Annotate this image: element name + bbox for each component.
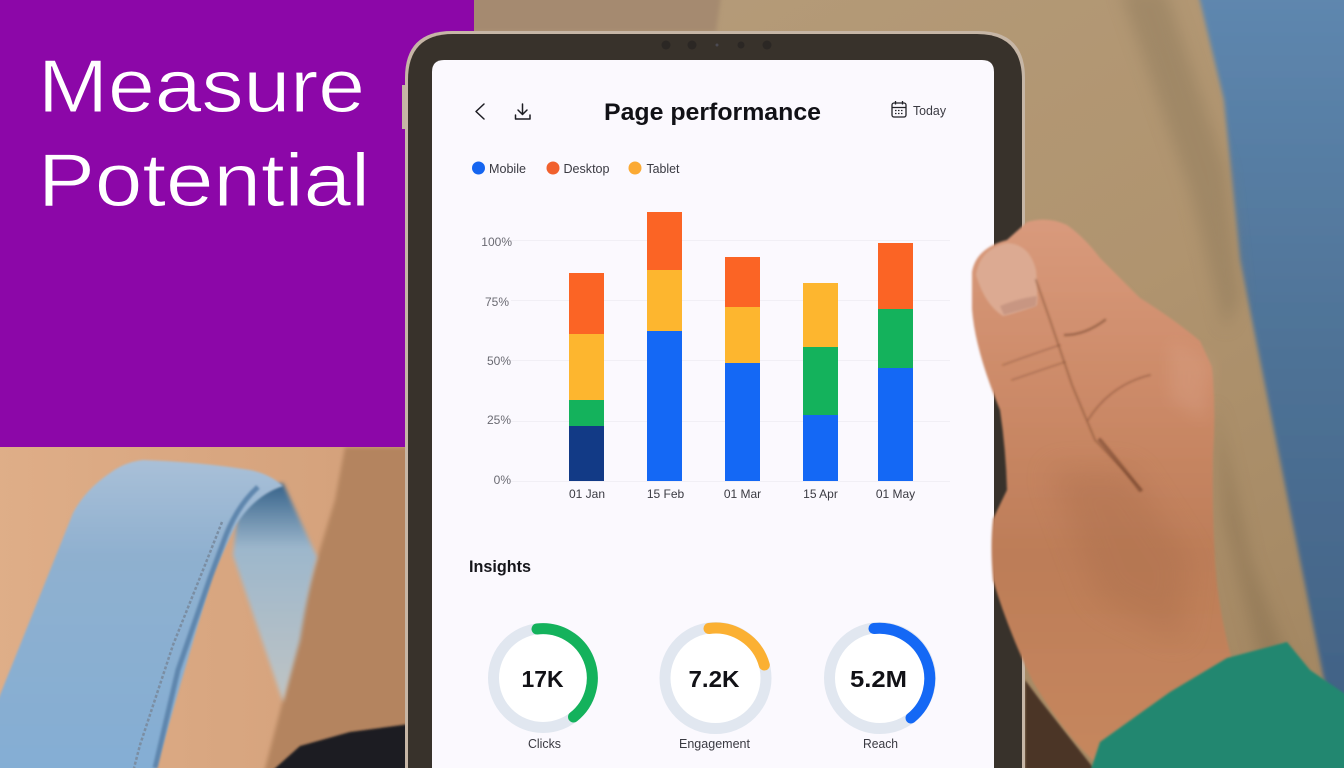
bar: 15 Feb: [647, 212, 682, 481]
bar: 15 Apr: [803, 283, 838, 481]
title: Measure: [38, 44, 365, 128]
chair strap: [0, 460, 317, 768]
tablet device: [402, 31, 1025, 768]
y axis labels: 75%: [485, 295, 509, 309]
x axis labels: 15 Feb: [647, 487, 685, 501]
photo: hand holding tablet: [972, 220, 1232, 762]
tablet frame: [405, 31, 1025, 768]
y axis labels: 25%: [487, 413, 511, 427]
ring: reach: Reach: [863, 736, 898, 751]
tablet screen: [432, 60, 994, 768]
y axis labels: 50%: [487, 354, 511, 368]
ring: reach: 5.2M: [850, 666, 907, 692]
x axis labels: 01 May: [876, 487, 915, 501]
darker back of hand shading: [1050, 470, 1190, 640]
legend: Mobile: [489, 162, 526, 176]
ring: reach: [830, 628, 930, 751]
icon: back chevron: [476, 104, 484, 119]
x axis labels: 01 Mar: [724, 487, 761, 501]
knuckle highlight: [1170, 340, 1210, 420]
icon: download: [516, 104, 530, 119]
bar: 01 Mar: [725, 257, 760, 481]
ring: clicks: 17K: [522, 666, 564, 692]
heading: insights: Insights: [469, 557, 531, 576]
tablet bezel: [408, 34, 1022, 768]
ring: clicks: Clicks: [528, 736, 561, 751]
title: Potential: [38, 138, 370, 222]
y axis labels: 100%: [481, 235, 512, 249]
thumb nail: [976, 243, 1037, 316]
bar: 01 Jan: [569, 273, 604, 481]
tablet camera dots: [662, 40, 772, 50]
photo: green sweater cuff: [1088, 642, 1344, 768]
bar: 01 May: [878, 243, 913, 481]
legend: Tablet: [646, 162, 680, 176]
x axis labels: [569, 487, 915, 501]
x axis labels: 15 Apr: [803, 487, 838, 501]
ring: engagement: Engagement: [679, 736, 750, 751]
ring: engagement: 7.2K: [688, 666, 740, 692]
ring: engagement: [665, 628, 766, 751]
legend: [472, 162, 680, 176]
heading: page performance: Page performance: [604, 99, 821, 126]
y axis labels: [481, 235, 512, 487]
date filter label: Today: [913, 104, 947, 118]
nail tip: [1000, 296, 1037, 315]
legend: Desktop: [564, 162, 610, 176]
x axis labels: 01 Jan: [569, 487, 605, 501]
icon: calendar: [892, 101, 906, 117]
bar chart: [481, 212, 950, 501]
title: [38, 44, 370, 222]
ring: clicks: [494, 628, 592, 751]
purple title panel: [0, 0, 474, 447]
tablet side button: [402, 85, 406, 129]
creases: [1003, 280, 1150, 490]
y axis labels: 0%: [494, 473, 511, 487]
